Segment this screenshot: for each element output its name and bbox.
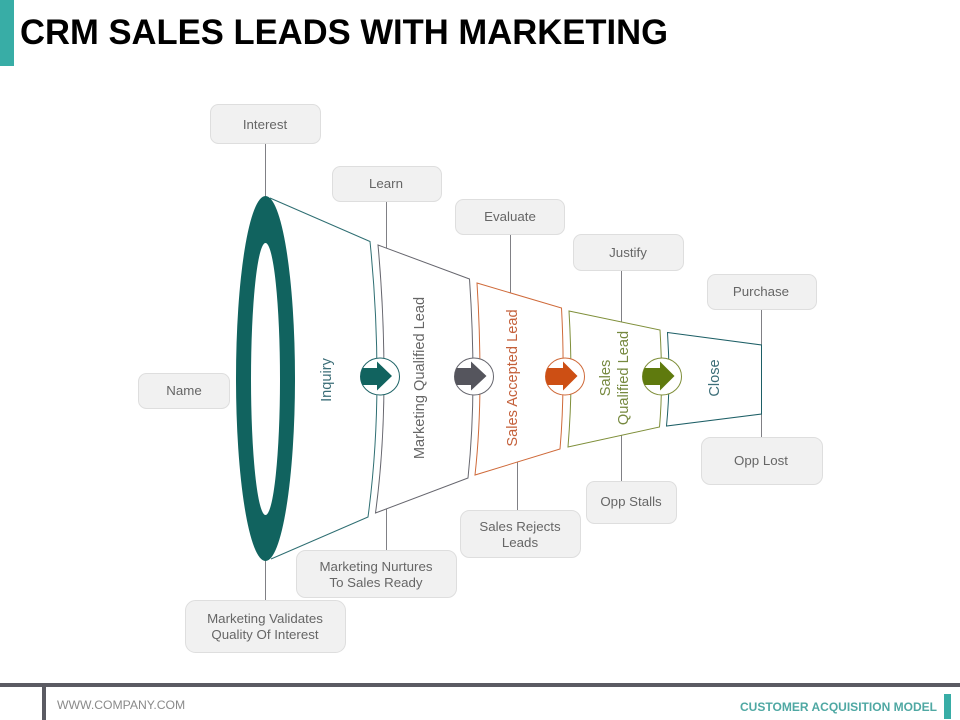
arrow: inquiry to marketing qualified bbox=[355, 358, 400, 395]
label: sales rejects leads bbox=[460, 510, 580, 558]
funnel stage: sales qualified lead bbox=[568, 311, 662, 447]
funnel stage: sales qualified lead: Sales bbox=[598, 360, 614, 396]
label: name: Name bbox=[166, 383, 202, 398]
label: justify: Justify bbox=[609, 245, 647, 260]
label: name bbox=[138, 374, 230, 408]
footer website: WWW.COMPANY.COM bbox=[57, 698, 185, 712]
funnel stage: inquiry bbox=[270, 198, 377, 559]
funnel stage: sales accepted lead: Sales Accepted Lead bbox=[505, 309, 521, 447]
label: evaluate: Evaluate bbox=[484, 209, 536, 224]
label: marketing nurtures to sales ready: Marketing Nurtures bbox=[319, 559, 433, 574]
funnel stage: close: Close bbox=[707, 359, 723, 397]
title accent bar bbox=[0, 0, 14, 66]
arrow: sales qualified to close bbox=[637, 358, 682, 395]
title: CRM SALES LEADS WITH MARKETING bbox=[20, 13, 668, 52]
label: interest: Interest bbox=[243, 117, 287, 132]
label: learn: Learn bbox=[369, 176, 403, 191]
funnel stage: close bbox=[666, 332, 762, 426]
footer accent bar bbox=[944, 694, 951, 719]
label: sales rejects leads: Leads bbox=[502, 535, 538, 550]
label: learn bbox=[332, 166, 442, 202]
label: sales rejects leads: Sales Rejects bbox=[479, 519, 561, 534]
label: marketing validates quality of interest: Quality Of Interest bbox=[211, 627, 319, 642]
label: purchase: Purchase bbox=[733, 284, 789, 299]
footer model name: CUSTOMER ACQUISITION MODEL bbox=[740, 700, 937, 714]
funnel stage: sales accepted lead bbox=[475, 283, 563, 475]
label: evaluate bbox=[456, 200, 564, 234]
label: marketing validates quality of interest: Marketing Validates bbox=[207, 611, 323, 626]
label: purchase bbox=[708, 274, 816, 310]
label: opp stalls bbox=[586, 482, 676, 524]
label: opp stalls: Opp Stalls bbox=[600, 494, 662, 509]
label: marketing nurtures to sales ready bbox=[296, 550, 456, 598]
label: marketing validates quality of interest bbox=[186, 600, 346, 652]
footer rule bbox=[0, 683, 960, 720]
label: opp lost: Opp Lost bbox=[734, 453, 788, 468]
arrow: sales accepted to sales qualified bbox=[540, 358, 584, 395]
funnel stage: sales qualified lead: Qualified Lead bbox=[616, 331, 632, 425]
label: marketing nurtures to sales ready: To Sales Ready bbox=[329, 575, 423, 590]
label: opp lost bbox=[702, 438, 822, 484]
funnel stage: marketing qualified lead: Marketing Qualified Lead bbox=[412, 297, 428, 459]
arrow: marketing qualified to sales accepted bbox=[449, 358, 494, 395]
label: interest bbox=[210, 104, 320, 144]
funnel mouth ring bbox=[236, 196, 295, 561]
funnel stage: inquiry: Inquiry bbox=[319, 357, 335, 402]
label: justify bbox=[574, 234, 684, 270]
funnel stage: marketing qualified lead bbox=[376, 245, 473, 513]
